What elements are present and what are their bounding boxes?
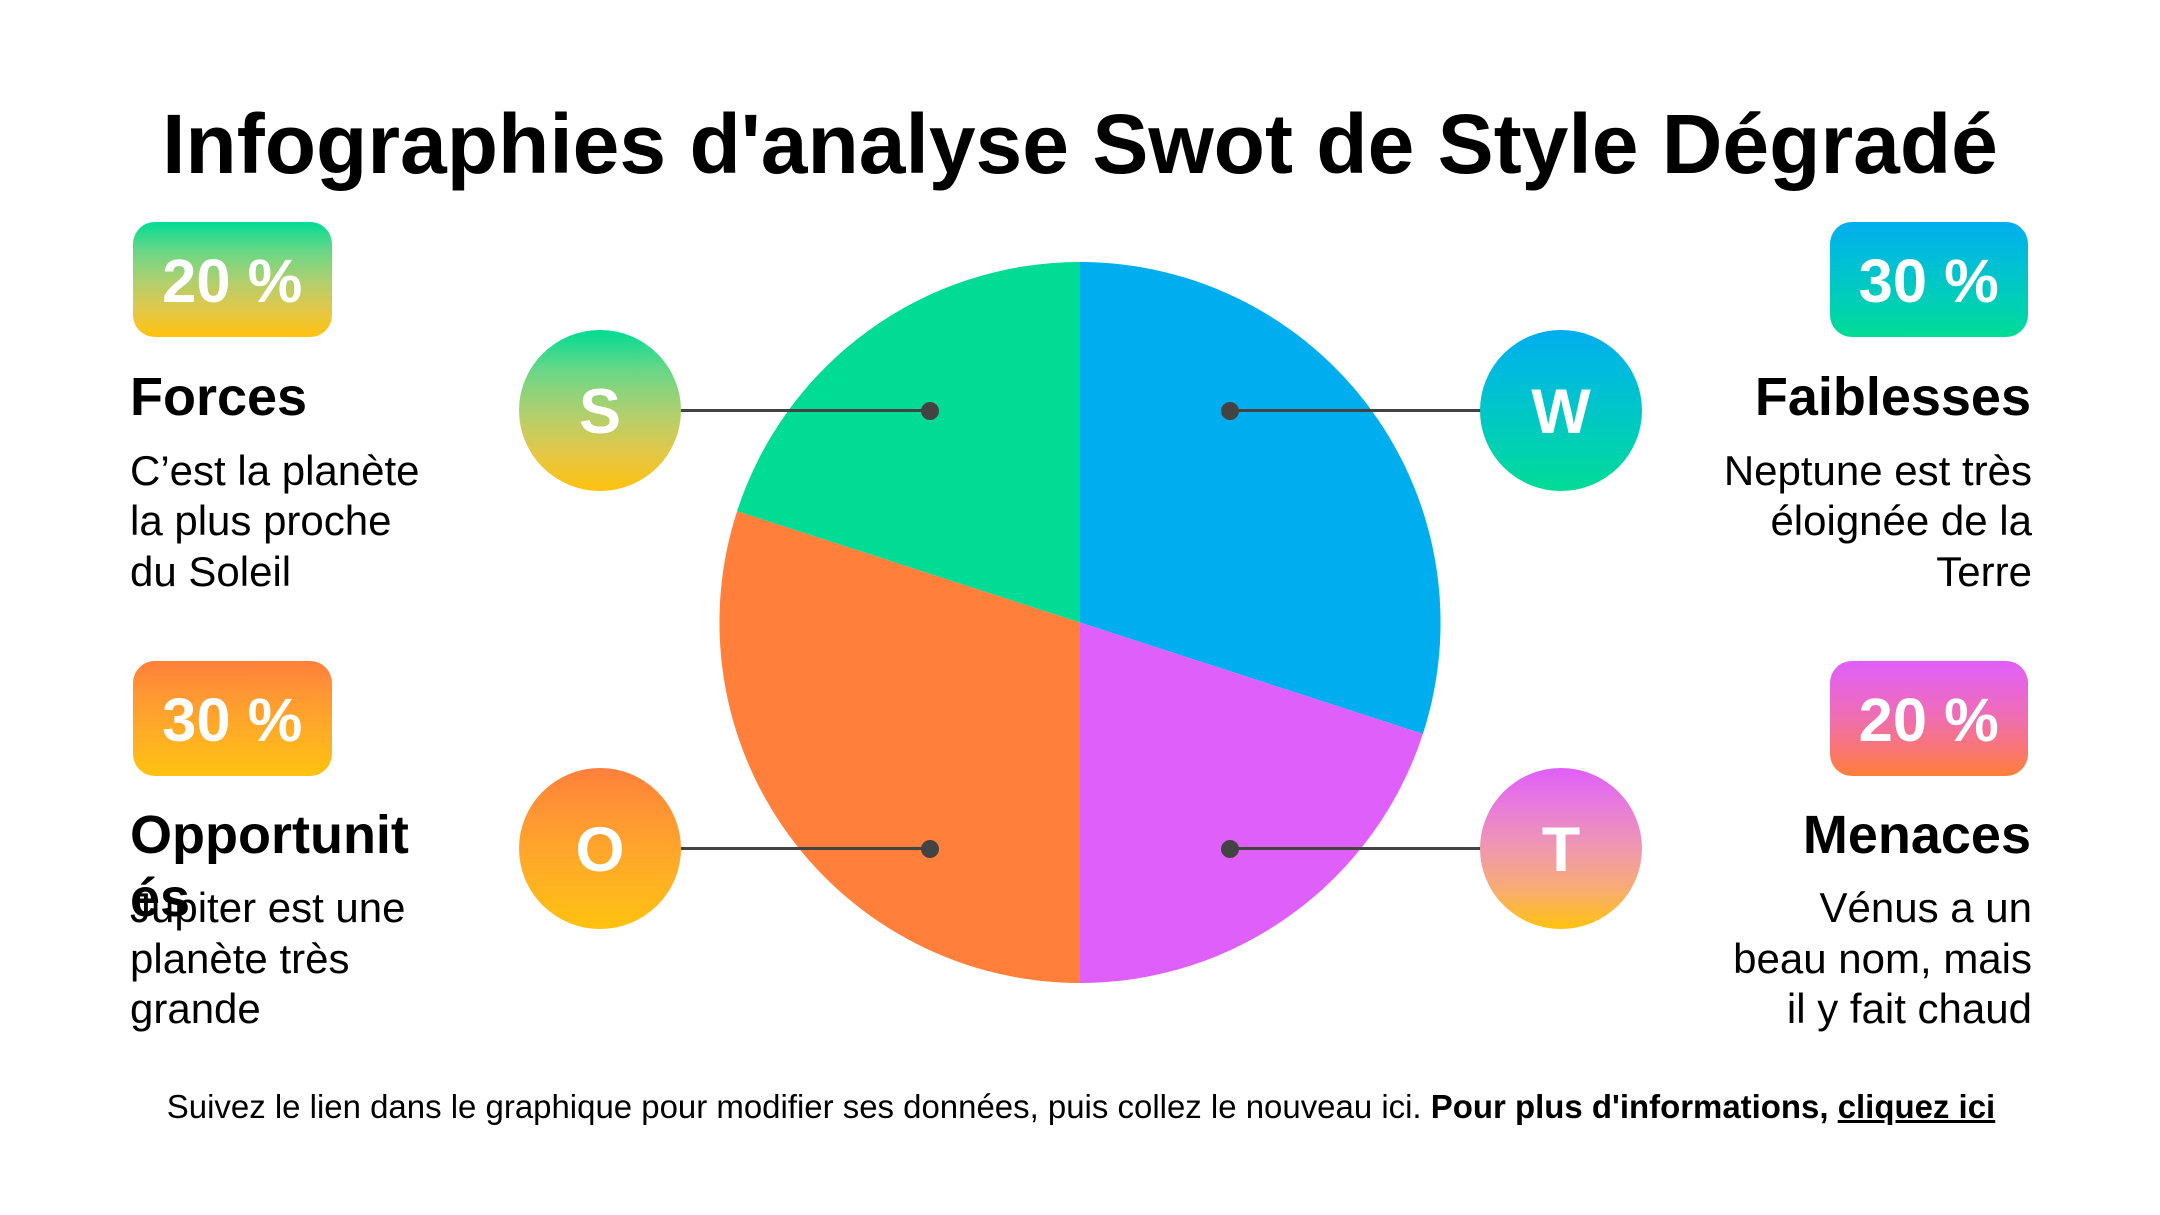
text: Menaces: beau nom, mais xyxy=(1733,935,2032,982)
circle: T: T xyxy=(1542,815,1580,885)
text: Menaces: il y fait chaud xyxy=(1787,985,2032,1032)
text: Opportunités: grande xyxy=(130,985,261,1032)
badge: S 20%: 20 % xyxy=(162,247,302,316)
connector: W xyxy=(1230,409,1481,412)
connector dot: T xyxy=(1221,840,1239,858)
badge: O 30%: 30 % xyxy=(162,686,302,755)
pie chart xyxy=(719,262,1441,983)
circle: O: O xyxy=(575,815,624,885)
text: Menaces xyxy=(1733,884,2032,1032)
connector: O xyxy=(680,847,930,850)
connector: T xyxy=(1230,847,1481,850)
badge: W 30%: 30 % xyxy=(1859,247,1999,316)
heading: Opportunités: Opportunités xyxy=(130,804,409,928)
text: Opportunités xyxy=(130,884,406,1032)
connector dot: W xyxy=(1221,402,1239,420)
text: Faiblesses xyxy=(1724,446,2032,595)
badge: T 20%: 20 % xyxy=(1859,686,1999,755)
connector dot: O xyxy=(921,840,939,858)
circle: S: S xyxy=(579,377,621,447)
text: Menaces: Vénus a un xyxy=(1819,884,2032,931)
text: Forces: C’est la planète xyxy=(130,446,420,494)
circle: W: W xyxy=(1531,377,1591,447)
circle: O xyxy=(519,768,681,929)
heading: Menaces: Menaces xyxy=(1803,805,2031,865)
heading: Forces: Forces xyxy=(130,367,307,427)
text: Opportunités: planète très xyxy=(130,935,349,982)
circle: W xyxy=(1480,330,1642,491)
connector dot: S xyxy=(921,402,939,420)
title: Infographies d'analyse Swot de Style Dégradé xyxy=(162,97,1998,191)
text: Opportunités: Jupiter est une xyxy=(130,884,406,931)
text: Faiblesses: éloignée de la xyxy=(1770,497,2032,544)
text: Forces xyxy=(130,446,420,595)
circle: T xyxy=(1480,768,1642,929)
heading: Faiblesses: Faiblesses xyxy=(1755,367,2031,427)
footer note: Suivez le lien dans le graphique pour modifier ses données, puis collez le nouveau ici. Pour plus d'informations, cliquez ici xyxy=(167,1088,1995,1124)
text: Faiblesses: Terre xyxy=(1936,548,2032,595)
badge: O 30% xyxy=(133,661,332,776)
text: Forces: la plus proche xyxy=(130,497,392,544)
badge: T 20% xyxy=(1830,661,2028,776)
connector: S xyxy=(680,409,930,412)
badge: S 20% xyxy=(133,222,332,337)
badge: W 30% xyxy=(1830,222,2028,337)
text: Faiblesses: Neptune est très xyxy=(1724,446,2032,494)
circle: S xyxy=(519,330,681,491)
text: Forces: du Soleil xyxy=(130,548,291,595)
